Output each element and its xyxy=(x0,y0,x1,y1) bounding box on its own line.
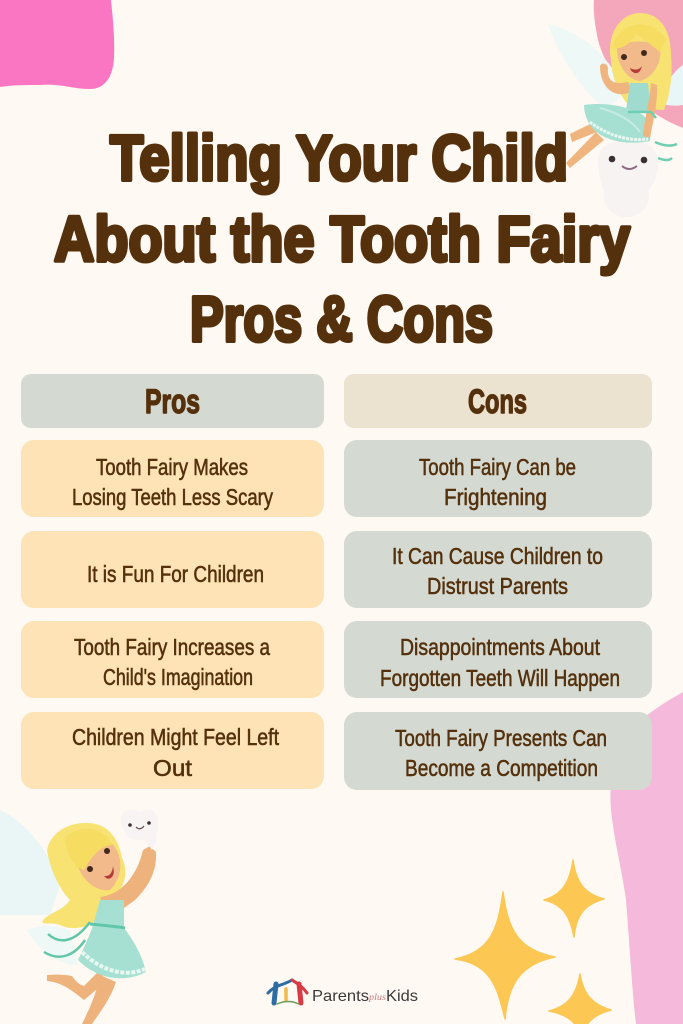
hair back xyxy=(42,823,125,928)
panel: cons column xyxy=(344,374,652,790)
illustration: fairy sitting on tooth xyxy=(548,13,683,217)
pro: less scary: Tooth Fairy Makes xyxy=(96,454,248,480)
icon: sparkle stars xyxy=(455,860,611,1024)
hair fringe xyxy=(65,829,112,870)
face xyxy=(78,840,120,890)
title: Telling Your Child xyxy=(110,122,568,194)
tooth xyxy=(598,141,658,217)
cons heading: Cons xyxy=(468,383,527,421)
blob: top left pink xyxy=(0,0,114,89)
pros heading xyxy=(21,374,324,428)
con: disappointments: Disappointments About xyxy=(400,634,601,660)
pro: imagination: Child's Imagination xyxy=(103,664,253,690)
logo icon: family house xyxy=(268,980,307,1004)
pro: left out xyxy=(21,712,324,789)
con: distrust: It Can Cause Children to xyxy=(392,543,603,569)
face xyxy=(617,42,660,81)
dress xyxy=(78,900,146,978)
title: Pros & Cons xyxy=(190,283,493,355)
pro: less scary: Losing Teeth Less Scary xyxy=(72,484,273,510)
blob: top right pink xyxy=(594,0,683,128)
sash xyxy=(628,112,677,160)
right arm xyxy=(643,83,657,138)
logo: Parents plus Kids xyxy=(268,980,418,1005)
blob: bottom right pink xyxy=(610,692,683,1024)
icon: upper star xyxy=(544,860,604,937)
pro: imagination xyxy=(21,621,324,698)
bodice xyxy=(626,83,651,111)
pro: fun xyxy=(21,531,324,608)
pro: imagination: Tooth Fairy Increases a xyxy=(74,634,270,660)
hair fringe xyxy=(612,24,666,52)
con: distrust xyxy=(344,531,652,608)
dress skirt xyxy=(584,104,650,143)
wings xyxy=(0,810,60,915)
wings xyxy=(548,24,625,108)
pro: left out: Children Might Feel Left xyxy=(72,724,280,750)
cons heading xyxy=(344,374,652,428)
pro: fun: It is Fun For Children xyxy=(87,561,264,587)
arm xyxy=(600,64,632,94)
con: frightening: Tooth Fairy Can be xyxy=(419,454,576,480)
con: competition xyxy=(344,712,652,790)
logo: Parents plus Kids: plus xyxy=(368,992,387,1002)
raised arm xyxy=(100,846,156,908)
icon: lower star xyxy=(549,974,611,1024)
logo: Parents plus Kids: Parents xyxy=(312,988,369,1005)
pros heading: Pros xyxy=(145,383,200,421)
logo: Parents plus Kids: Kids xyxy=(386,988,418,1005)
con: disappointments xyxy=(344,621,652,698)
illustration: fairy holding tooth xyxy=(0,809,158,1024)
title xyxy=(54,122,630,355)
panel: pros column xyxy=(21,374,324,789)
pro: less scary xyxy=(21,440,324,517)
con: disappointments: Forgotten Teeth Will Happen xyxy=(380,665,620,691)
hair back xyxy=(610,13,672,110)
con: competition: Become a Competition xyxy=(405,755,598,781)
legs xyxy=(570,124,597,142)
con: competition: Tooth Fairy Presents Can xyxy=(395,725,607,751)
legs xyxy=(47,972,108,1000)
small tooth xyxy=(121,809,158,850)
icon: large star xyxy=(455,892,555,1019)
pro: left out: Out xyxy=(153,755,193,781)
con: distrust: Distrust Parents xyxy=(427,573,568,599)
con: frightening: Frightening xyxy=(444,484,547,510)
con: frightening xyxy=(344,440,652,517)
